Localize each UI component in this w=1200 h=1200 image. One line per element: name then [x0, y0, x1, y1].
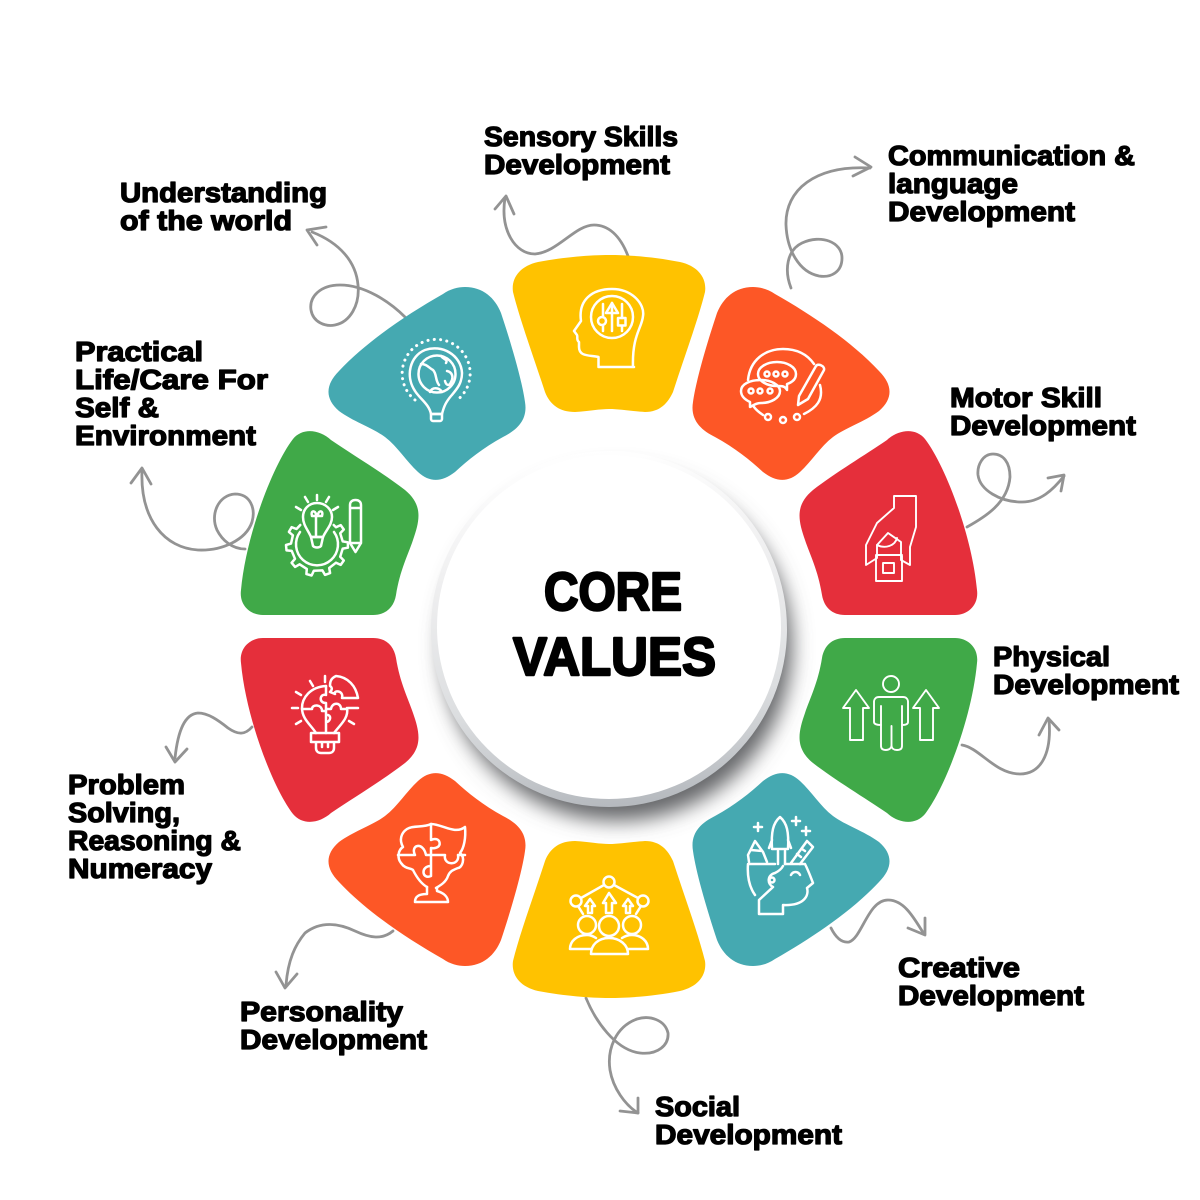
- label: practical life: Life/Care For: [75, 364, 268, 395]
- title: [513, 562, 716, 687]
- label: motor skill: Development: [950, 410, 1136, 441]
- segment: practical life (green): [241, 431, 418, 615]
- label: understanding the world: of the world: [120, 205, 292, 236]
- label: physical: [993, 641, 1179, 700]
- label: social: Development: [655, 1119, 842, 1150]
- icon: people group with arrows: [570, 876, 648, 954]
- arrow: sensory skills: [495, 196, 628, 256]
- label: communication: language: [888, 168, 1018, 199]
- icon: head with tools: [748, 817, 813, 914]
- segment: creative (teal): [693, 773, 890, 966]
- arrow: motor skill: [967, 454, 1064, 527]
- label: communication: Communication &: [888, 140, 1135, 171]
- arrow: physical: [962, 718, 1059, 774]
- label: personality: Personality: [240, 996, 403, 1027]
- segment: personality (orange): [328, 773, 525, 966]
- title: VALUES: [513, 627, 716, 687]
- label: motor skill: Motor Skill: [950, 382, 1102, 413]
- label: creative: [898, 952, 1084, 1011]
- label: problem solving: Reasoning &: [68, 825, 241, 856]
- arrow: social: [586, 998, 668, 1113]
- icon: puzzle head: [398, 824, 465, 902]
- label: understanding the world: Understanding: [120, 177, 327, 208]
- label: physical: Development: [993, 669, 1179, 700]
- label: physical: Physical: [993, 641, 1110, 672]
- label: sensory skills: Development: [484, 149, 670, 180]
- label: practical life: Environment: [75, 420, 256, 451]
- label: personality: Development: [240, 1024, 427, 1055]
- label: communication: [888, 140, 1135, 227]
- label: practical life: [75, 336, 268, 451]
- arrow: problem solving: [166, 713, 252, 762]
- label: practical life: Practical: [75, 336, 203, 367]
- label: understanding the world: [120, 177, 327, 236]
- arrow: practical life: [131, 468, 253, 550]
- segment: motor skill (red): [800, 431, 977, 615]
- label: sensory skills: [484, 121, 678, 180]
- label: problem solving: [68, 769, 241, 884]
- label: practical life: Self &: [75, 392, 159, 423]
- segment: communication (orange): [693, 287, 890, 480]
- label: sensory skills: Sensory Skills: [484, 121, 678, 152]
- arrow: personality: [276, 924, 393, 988]
- icon: hand holding block: [866, 496, 916, 581]
- icon: head with sliders: [574, 289, 643, 367]
- label: problem solving: Problem: [68, 769, 185, 800]
- segment: physical (green): [800, 638, 977, 822]
- label: motor skill: [950, 382, 1136, 441]
- label: personality: [240, 996, 427, 1055]
- arrow: creative: [831, 900, 925, 942]
- label: creative: Creative: [898, 952, 1020, 983]
- label: social: [655, 1091, 842, 1150]
- label: creative: Development: [898, 980, 1084, 1011]
- arrow: understanding the world: [307, 227, 405, 325]
- label: problem solving: Numeracy: [68, 853, 212, 884]
- title: CORE: [544, 562, 682, 622]
- segment: social (yellow): [513, 841, 705, 998]
- icon: puzzle light bulb: [292, 676, 358, 753]
- centre circle: [431, 451, 792, 821]
- icon: bulb gear pencil: [286, 495, 361, 576]
- icon: globe light bulb: [402, 339, 470, 421]
- arrow: communication: [786, 157, 871, 288]
- segment: problem solving (red): [241, 638, 418, 822]
- label: social: Social: [655, 1091, 740, 1122]
- segment: sensory skills (yellow): [513, 255, 705, 412]
- segment: understanding the world (teal): [328, 287, 525, 480]
- label: communication: Development: [888, 196, 1075, 227]
- icon: person with arrows: [843, 676, 939, 750]
- label: problem solving: Solving,: [68, 797, 180, 828]
- icon: speech bubbles and pencil: [741, 349, 824, 423]
